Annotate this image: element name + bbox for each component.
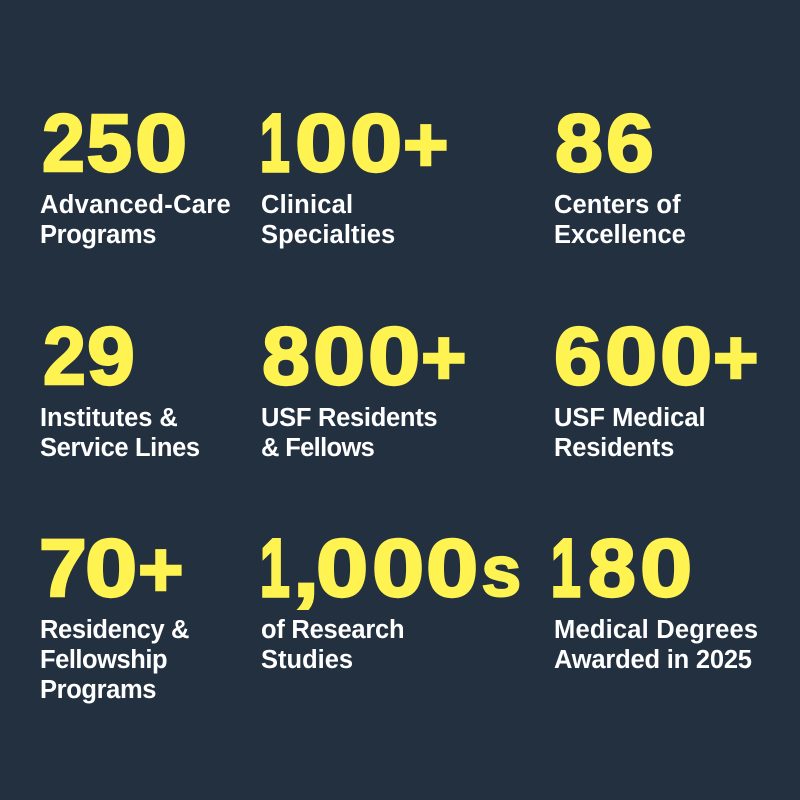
stat: 29 Institutes & Service Lines: 9 [87,310,135,402]
stat: 1,000s of Research Studies: , [293,522,319,614]
stat: 100+ Clinical Specialties: Specialties [261,221,395,249]
stat: 70+ Residency & Fellowship Programs [39,522,189,704]
stat: 180 Medical Degrees Awarded in 2025: Medical Degrees [554,616,758,644]
stat: 1,000s of Research Studies: of Research [261,616,404,644]
stat: 70+ Residency & Fellowship Programs: + [138,524,184,612]
stat: 600+ USF Medical Residents: 0 [660,310,712,402]
stat: 70+ Residency & Fellowship Programs: Programs [40,676,156,704]
stat: 600+ USF Medical Residents: 0 [605,310,657,402]
stat: 800+ USF Residents & Fellows: 0 [368,310,420,402]
stat: 800+ USF Residents & Fellows: & Fellows [261,434,374,462]
stat: 29 Institutes & Service Lines: Service Lines [40,434,200,462]
stat: 70+ Residency & Fellowship Programs: Residency & [40,616,189,644]
stat: 86 Centers of Excellence: 8 [555,98,603,188]
stat: 600+ USF Medical Residents: + [713,312,759,400]
stat: 100+ Clinical Specialties: 0 [295,98,347,188]
stat: 600+ USF Medical Residents: 6 [554,310,602,402]
stat: 1,000s of Research Studies: 0 [426,522,478,614]
stat: 86 Centers of Excellence: Centers of [554,191,681,219]
stat: 1,000s of Research Studies: s [481,532,521,612]
stat: 70+ Residency & Fellowship Programs: 7 [39,522,87,614]
stat: 70+ Residency & Fellowship Programs: 0 [85,522,137,614]
stat: 1,000s of Research Studies: 1 [260,522,290,614]
stat: 800+ USF Residents & Fellows: USF Residents [261,404,437,432]
stat: 86 Centers of Excellence [554,98,686,249]
stat: 180 Medical Degrees Awarded in 2025: 8 [588,522,636,614]
stat: 100+ Clinical Specialties: 0 [350,98,402,188]
stat: 1,000s of Research Studies: 0 [316,522,368,614]
stat: 250 Advanced-Care Programs: 2 [42,98,84,188]
stat: 1,000s of Research Studies: Studies [261,646,353,674]
stat: 800+ USF Residents & Fellows: + [421,312,467,400]
stat: 1,000s of Research Studies: 0 [372,522,424,614]
stat: 1,000s of Research Studies [260,522,521,674]
stat: 800+ USF Residents & Fellows: 0 [313,310,365,402]
stat: 100+ Clinical Specialties: 1 [260,98,290,188]
stat: 180 Medical Degrees Awarded in 2025: 0 [640,522,692,614]
stat: 100+ Clinical Specialties [260,98,449,249]
stat: 180 Medical Degrees Awarded in 2025 [551,522,758,674]
stat: 250 Advanced-Care Programs: Advanced-Care [40,191,231,219]
stat: 250 Advanced-Care Programs [40,98,231,249]
stat: 29 Institutes & Service Lines: 2 [42,310,85,402]
stat: 70+ Residency & Fellowship Programs: Fellowship [40,646,167,674]
stat: 250 Advanced-Care Programs: 5 [86,98,132,188]
stat: 600+ USF Medical Residents [554,310,759,462]
stat: 250 Advanced-Care Programs: Programs [40,221,156,249]
stat: 600+ USF Medical Residents: USF Medical [554,404,706,432]
stat: 180 Medical Degrees Awarded in 2025: 1 [551,522,581,614]
stat: 86 Centers of Excellence: 6 [606,98,654,188]
stat: 86 Centers of Excellence: Excellence [554,221,686,249]
stat: 800+ USF Residents & Fellows [261,310,467,462]
stat: 800+ USF Residents & Fellows: 8 [262,310,310,402]
stat: 100+ Clinical Specialties: + [403,100,449,188]
stat: 600+ USF Medical Residents: Residents [554,434,674,462]
stat: 100+ Clinical Specialties: Clinical [261,191,353,219]
stat: 180 Medical Degrees Awarded in 2025: Awarded in 2025 [554,646,752,674]
stat: 29 Institutes & Service Lines: Institutes & [40,404,178,432]
stat: 29 Institutes & Service Lines [40,310,200,462]
stat: 250 Advanced-Care Programs: 0 [135,98,187,188]
